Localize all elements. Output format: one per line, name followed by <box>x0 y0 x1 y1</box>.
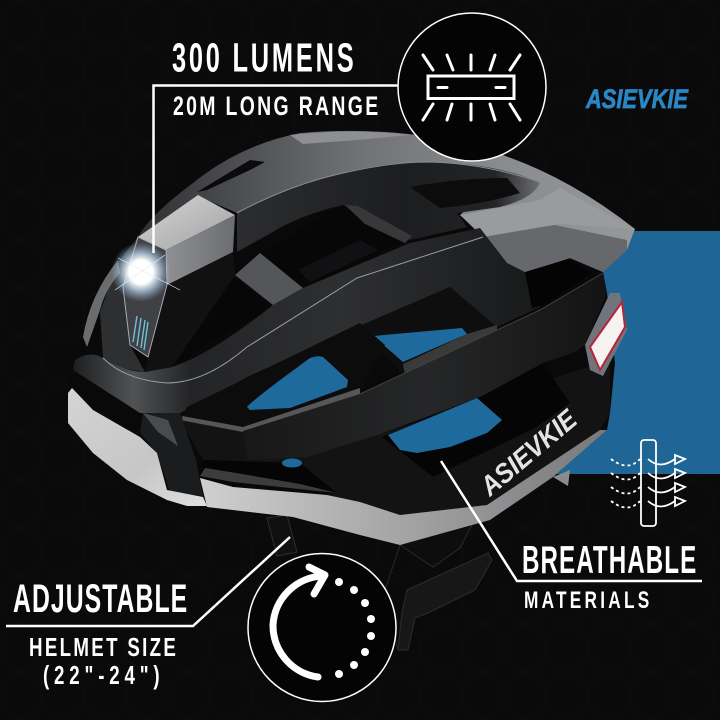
leader line: strap <box>6 537 290 626</box>
icon: light beam circle <box>398 13 546 161</box>
headlight light top surface <box>138 195 235 250</box>
top vent slot <box>410 178 520 208</box>
right upper vent <box>525 259 592 308</box>
textured rim <box>345 205 412 243</box>
headlight flare <box>111 242 171 302</box>
right grey facet <box>483 222 627 275</box>
arch highlight <box>237 162 540 213</box>
shell top facet <box>290 132 410 144</box>
upper black arch <box>237 162 540 252</box>
subheading: materials: MATERIALS <box>524 587 649 614</box>
subheading: helmet size: HELMET SIZE <box>29 632 176 662</box>
icon: rotation dial circle <box>248 554 396 702</box>
band C <box>243 273 607 460</box>
upper grey shell <box>138 131 635 275</box>
flare rays <box>115 255 180 290</box>
upper opening <box>260 205 410 288</box>
small blue hole <box>282 458 302 468</box>
heading: 300 lumens: 300 LUMENS <box>172 35 354 81</box>
frame highlight <box>143 413 178 446</box>
front frame <box>140 413 203 496</box>
taillight lens <box>590 302 625 370</box>
band C upper highlight <box>360 273 603 394</box>
left light panel <box>68 388 207 506</box>
middle vent opening <box>357 287 497 374</box>
leader line: vent <box>441 461 702 581</box>
opening inner panel <box>298 240 378 282</box>
light panel face <box>123 237 167 357</box>
blue vent 1 <box>247 356 348 410</box>
leader line: headlight <box>154 86 400 253</box>
vent right rim texture <box>403 325 497 375</box>
lower left opening <box>160 277 272 367</box>
opening texture <box>200 468 337 493</box>
callout: breathable <box>441 461 702 614</box>
side vent rim texture <box>182 388 360 435</box>
band B <box>73 228 540 413</box>
band B highlight <box>103 237 483 383</box>
teal vent lines <box>133 316 148 350</box>
callout: 300 lumens <box>154 35 400 253</box>
helmet <box>68 131 635 545</box>
callout: adjustable <box>6 537 290 690</box>
helmet straps and buckle <box>267 515 492 650</box>
side logo: ASIEVKIE <box>474 404 584 503</box>
lower grey strip <box>200 430 607 545</box>
lower black body <box>180 360 610 515</box>
helmet base silhouette <box>68 131 635 545</box>
chin tab <box>553 470 570 486</box>
lower opening <box>200 460 337 493</box>
blue background block <box>540 231 720 474</box>
shell side slit <box>197 160 265 192</box>
black block under face <box>145 252 235 372</box>
blue vent 2 <box>373 328 467 362</box>
headlight front face <box>166 215 235 285</box>
side vent opening <box>182 323 385 430</box>
subheading: 20m long range: 20M LONG RANGE <box>173 91 378 121</box>
grey crossbar <box>235 253 303 305</box>
right lighter strip <box>460 188 635 237</box>
subheading: size range: (22"-24") <box>43 660 160 690</box>
blue vent 3 <box>388 398 502 453</box>
nose frame <box>100 237 145 372</box>
textured front strip <box>83 260 120 347</box>
taillight housing <box>585 293 627 376</box>
icon: airflow through material <box>611 440 685 526</box>
rear dark vent <box>382 363 570 477</box>
heading: breathable: BREATHABLE <box>522 538 696 581</box>
brand logo: ASIEVKIE <box>585 86 689 114</box>
heading: adjustable: ADJUSTABLE <box>13 577 187 622</box>
